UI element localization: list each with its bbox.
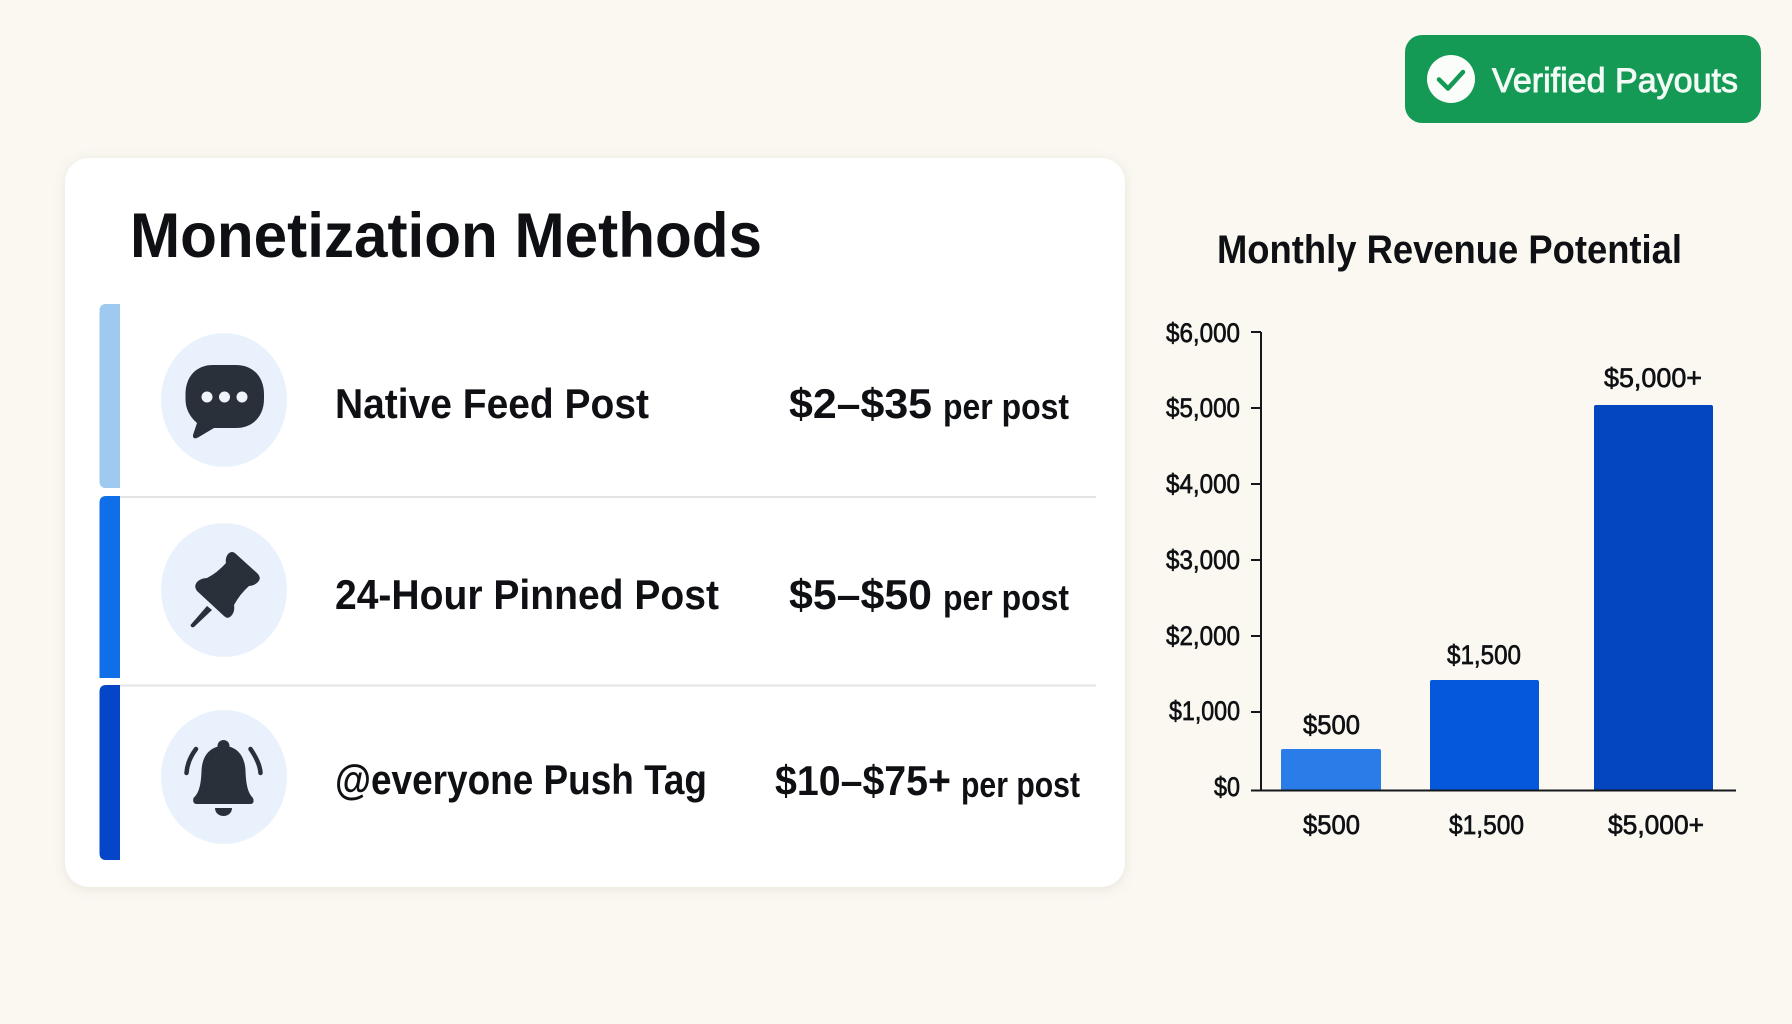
value labels: $5,000+ [1604,363,1702,393]
icon: chat bubble [161,333,287,467]
accent bar light blue [100,304,120,488]
bar chart: monthly revenue [1166,318,1736,840]
y axis labels: $3,000 [1166,545,1240,575]
heading: monthly revenue potential: Monthly Revenue Potential [1217,228,1682,272]
category labels: $500 [1303,810,1360,840]
y axis labels: $0 [1214,772,1240,802]
y axis labels: $6,000 [1166,318,1240,348]
label: pinned post: 24-Hour Pinned Post [335,571,719,618]
value labels [1303,363,1702,740]
price: native feed post [789,380,1069,427]
price: native feed post: $2–$35 [789,380,932,427]
price: everyone push tag: $10–$75+ [775,757,951,804]
icon: check mark [1427,55,1475,103]
category labels [1303,810,1704,840]
axes [1251,332,1736,790]
y axis labels: $5,000 [1166,393,1240,423]
price: pinned post [789,571,1069,618]
row: everyone push tag [100,685,1080,860]
price: native feed post: per post [943,386,1069,427]
row: native feed post [100,304,1069,488]
y axis labels [1166,318,1240,802]
badge: verified payouts [1405,35,1761,123]
price: pinned post: per post [943,577,1069,618]
value labels: $500 [1303,710,1360,740]
bars [1281,405,1713,790]
heading: monetization methods: Monetization Methods [130,201,762,271]
row: pinned post [100,496,1069,678]
panel: monetization methods [65,158,1125,887]
category labels: $5,000+ [1608,810,1704,840]
accent bar mid blue [100,496,120,678]
value labels: $1,500 [1447,640,1521,670]
category labels: $1,500 [1449,810,1524,840]
icon: bell [161,710,287,844]
label: everyone push tag: @everyone Push Tag [335,756,707,803]
price: pinned post: $5–$50 [789,571,932,618]
y axis labels: $4,000 [1166,469,1240,499]
price: everyone push tag: per post [961,764,1080,805]
label: native feed post: Native Feed Post [335,380,649,427]
accent bar dark blue [100,685,120,860]
badge label: Verified Payouts [1492,62,1738,100]
price: everyone push tag [775,757,1080,805]
y axis labels: $1,000 [1169,696,1240,726]
y axis labels: $2,000 [1166,621,1240,651]
icon: push pin [161,523,287,657]
